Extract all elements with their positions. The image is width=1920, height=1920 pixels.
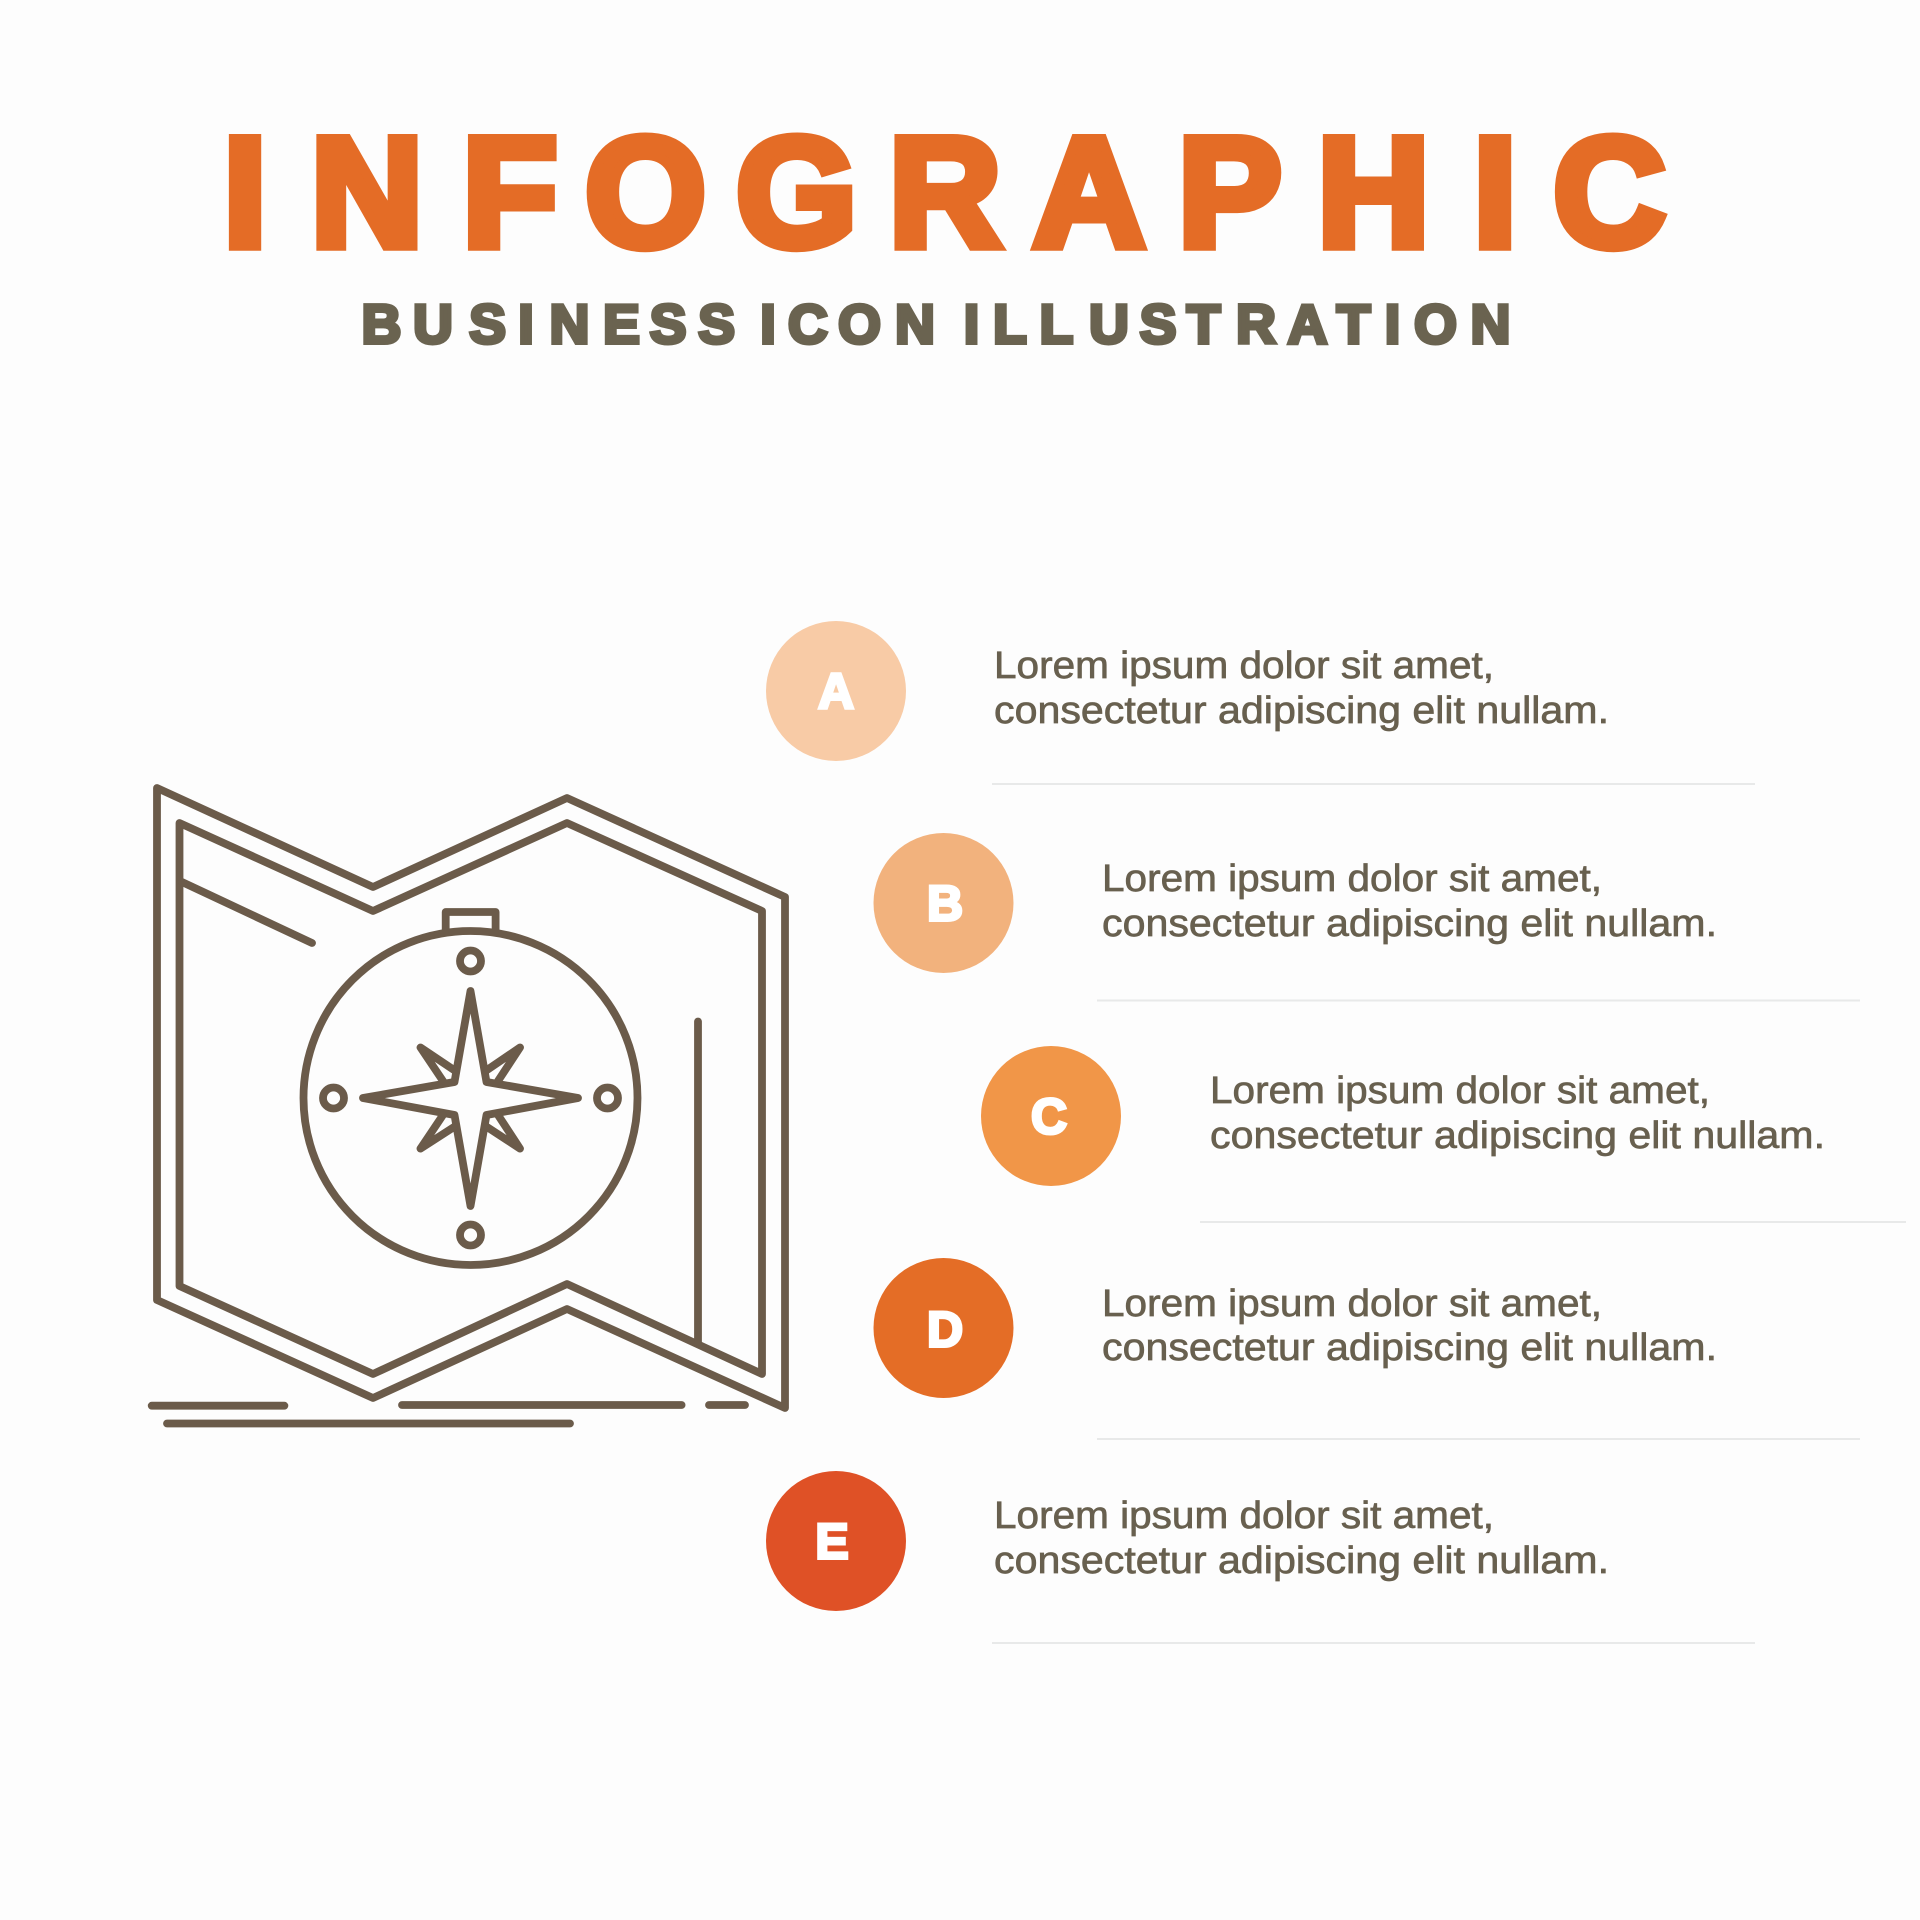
map fold line right [694,1022,702,1342]
badge C [981,1046,1121,1186]
text E: consectetur adipiscing elit nullam. [994,1540,1609,1582]
item B [874,833,1860,1000]
title: INFOGRAPHIC [224,106,1665,279]
letter A: A [818,664,854,720]
item E [766,1471,1755,1643]
subtitle: BUSINESS ICON ILLUSTRATION [362,293,1510,355]
compass north marker [460,950,481,972]
text B: consectetur adipiscing elit nullam. [1102,903,1717,945]
compass east marker [597,1088,618,1108]
item C [981,1046,1906,1222]
icon: folded map with compass [152,788,785,1424]
item D [874,1258,1860,1439]
letter C: C [1031,1088,1067,1144]
badge B [874,833,1014,973]
text E: Lorem ipsum dolor sit amet, [994,1495,1494,1537]
text A: Lorem ipsum dolor sit amet, [994,645,1494,687]
rule C [1200,1221,1906,1223]
text B: Lorem ipsum dolor sit amet, [1102,858,1602,900]
rule A [992,783,1755,785]
letter D: D [927,1302,963,1358]
compass top loop [446,912,496,930]
letter E: E [815,1514,849,1570]
text A: consectetur adipiscing elit nullam. [994,690,1609,732]
badge A [766,621,906,761]
text D: consectetur adipiscing elit nullam. [1102,1327,1717,1369]
text D: Lorem ipsum dolor sit amet, [1102,1283,1602,1325]
badge E [766,1471,906,1611]
compass south marker [460,1224,481,1246]
map fold line left [182,882,312,943]
letter B: B [927,876,963,932]
map outer outline [157,788,785,1408]
compass west marker [323,1088,344,1108]
text C: Lorem ipsum dolor sit amet, [1210,1070,1710,1112]
compass body [304,931,638,1265]
compass main star [363,991,578,1206]
ground lines [152,1405,745,1424]
map inner outline [180,823,762,1374]
badge D [874,1258,1014,1398]
item A [766,621,1755,784]
rule B [1097,1000,1860,1002]
rule E [992,1642,1755,1644]
rule D [1097,1438,1860,1440]
text C: consectetur adipiscing elit nullam. [1210,1115,1825,1157]
compass diagonal points [420,1048,520,1149]
